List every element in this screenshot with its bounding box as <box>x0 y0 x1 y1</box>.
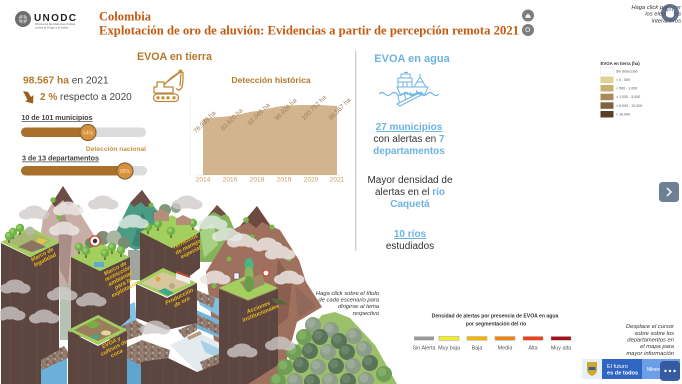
progress bar: departamentos: 3 de 13 departamentos <box>22 154 99 162</box>
mountain: green peak <box>113 190 160 280</box>
icon: search button <box>522 24 534 36</box>
area chart: historic detection: 2018 <box>250 176 265 184</box>
hill: forest <box>270 312 397 384</box>
footer: government banner <box>582 359 680 379</box>
legend: water alert density: Muy alta <box>551 346 571 352</box>
text: highest density: Caquetá <box>390 199 430 210</box>
column: Producción de oro: Producción <box>164 287 195 307</box>
column: Territorios de manejo especial <box>140 203 205 290</box>
note: click on scenario title: de cada escenario para <box>318 298 380 304</box>
progress bar: departamentos: 88% <box>120 169 131 175</box>
column: Territorios de manejo especial: Territorios <box>172 233 199 251</box>
note: move cursor: mayor información <box>626 351 674 357</box>
legend: EVOA en tierra: > 500 - 1.000 <box>616 86 637 90</box>
logo: UNODC <box>15 11 76 30</box>
column: Territorios de manejo especial: especial <box>180 245 203 260</box>
button: next <box>659 182 679 202</box>
legend: water alert density: Media <box>498 346 512 352</box>
text: municipalities and departments in water: con alertas en 7 <box>373 134 445 145</box>
button: more options <box>660 361 680 381</box>
column: EVOA y cultivos de coca <box>68 315 131 384</box>
heading: EVOA en tierra: EVOA en tierra <box>137 51 213 63</box>
column: Marco de legalidad: Marco de <box>30 247 55 263</box>
clouds <box>0 196 304 358</box>
hint: interactive elements: los elementos <box>645 12 681 18</box>
column: Territorios de manejo especial: de manejo <box>175 238 202 256</box>
area chart: historic detection: 92.046 ha <box>246 102 272 127</box>
title: Colombia <box>99 10 152 24</box>
column: Acciones institucionales: institucionales <box>242 304 280 324</box>
legend: EVOA en tierra: Sin detección <box>616 70 638 74</box>
legend: EVOA en tierra: EVOA en tierra (ha) <box>600 61 640 66</box>
column: Marco de restricción ambiental: explotación <box>111 279 142 299</box>
text: rivers studied <box>386 229 434 252</box>
logo: UNODC: UNODC <box>34 13 76 24</box>
note: click on scenario title: Haga click sobre el título <box>316 291 380 297</box>
column: Marco de restricción ambiental: ambiental <box>108 270 134 288</box>
area chart: historic detection: 2016 <box>223 176 238 184</box>
legend: water alert density: por segmentación del río <box>466 322 526 328</box>
heading: Detección histórica: Detección histórica <box>231 75 311 85</box>
progress bar: municipios: 54% <box>83 130 94 136</box>
column: Marco de legalidad <box>1 224 59 384</box>
hint: interactive elements: interactivos <box>652 18 681 24</box>
text: municipalities and departments in water: departamentos <box>373 146 445 157</box>
legend: EVOA en tierra <box>600 61 642 118</box>
progress bar: departamentos <box>21 154 147 179</box>
column: Acciones institucionales: Acciones <box>245 301 271 316</box>
column: EVOA y cultivos de coca: cultivos de <box>100 339 129 358</box>
stat: hectares in 2021: 98.567 ha en 2021 <box>23 76 109 86</box>
area chart: historic detection: 100.752 ha <box>300 94 328 122</box>
area chart: historic detection: 2020 <box>304 176 319 184</box>
area chart: historic detection: 2014 <box>196 176 211 184</box>
stat: change versus 2020: 2 % respecto a 2020 <box>40 92 132 103</box>
column: Acciones institucionales <box>219 258 287 384</box>
column: Marco de legalidad: legalidad <box>33 252 58 269</box>
text: municipalities and departments in water: 27 municipios <box>376 122 443 133</box>
icon: dredging boat <box>379 72 439 106</box>
legend: water alert density: Sin Alerta <box>412 346 436 352</box>
note: click on scenario title <box>316 291 380 317</box>
legend: EVOA en tierra: > 10.000 <box>616 112 630 116</box>
icon: home button <box>522 10 534 22</box>
illustration: mountains and scenarios <box>0 186 397 384</box>
note: move cursor <box>626 324 675 357</box>
progress bar: municipios: 10 de 101 municipios <box>22 113 92 122</box>
note: move cursor: el mapa para <box>640 344 675 350</box>
column: Marco de restricción ambiental: restricción <box>104 265 133 283</box>
legend: water alert density: Densidad de alertas por presencia de EVOA en agua <box>432 314 558 320</box>
column: Producción de oro <box>136 268 198 330</box>
title <box>99 10 519 38</box>
column: Marco de restricción ambiental: para la <box>113 278 133 292</box>
riverbank: rock bands <box>37 288 223 372</box>
area chart: historic detection: 98.567 ha <box>327 97 353 122</box>
legend: water alert density: Baja <box>472 346 482 352</box>
note: move cursor: Desplace el cursor <box>626 324 675 330</box>
area chart: historic detection: 2019 <box>277 176 292 184</box>
legend: water alert density: Alta <box>528 346 538 352</box>
footer: government banner: Minenergía <box>647 367 672 373</box>
mountain: right green peak <box>196 205 238 262</box>
text: municipalities and departments in water <box>373 122 445 157</box>
column: Marco de restricción ambiental <box>71 230 142 338</box>
area chart: historic detection <box>190 94 353 184</box>
mountain: large brown <box>206 206 322 384</box>
title: Explotación de oro de aluvión: Evidencias a partir de percepción remota 2021 <box>99 24 519 38</box>
footer: government banner: El futuro <box>607 364 628 370</box>
label: Detección nacional: Detección nacional <box>86 146 146 153</box>
note: click on scenario title: dirigirse al tema <box>338 304 380 310</box>
legend: EVOA en tierra: > 0 - 500 <box>616 78 630 82</box>
column: Producción de oro: de oro <box>173 296 192 309</box>
hint: interactive elements: Haga click para ver <box>631 5 682 11</box>
note: click on scenario title: respectivo <box>353 311 380 317</box>
progress bar: municipios <box>21 113 146 140</box>
text: rivers studied: estudiados <box>386 241 434 252</box>
column: Marco de restricción ambiental: Marco de <box>103 261 128 277</box>
icon: excavator <box>154 70 183 102</box>
logo: UNODC: Oficina de las Naciones Unidas <box>35 22 76 26</box>
heading: EVOA en agua: EVOA en agua <box>374 53 451 65</box>
note: move cursor: sobre sobre los <box>634 331 674 337</box>
text: rivers studied: 10 ríos <box>394 229 427 240</box>
note: move cursor: departamentos en <box>627 338 674 344</box>
mountain: pink peak <box>40 186 97 340</box>
area chart: historic detection: 78.939 ha <box>192 110 218 135</box>
text: highest density: Mayor densidad de <box>367 175 453 186</box>
text: highest density: alertas en el río <box>375 187 445 198</box>
footer: government banner: es de todos <box>607 370 638 376</box>
legend: EVOA en tierra: > 1.000 - 5.000 <box>616 95 640 99</box>
text: highest density <box>367 175 453 210</box>
area chart: historic detection: 2021 <box>330 176 345 184</box>
river: waterfalls and pools <box>41 290 237 384</box>
area chart: historic detection: 83.620 ha <box>219 107 245 132</box>
legend: EVOA en tierra: > 5.000 - 10.000 <box>616 104 642 108</box>
column: EVOA y cultivos de coca: coca <box>110 348 124 359</box>
legend: water alert density: Muy baja <box>438 346 460 352</box>
legend: water alert density <box>412 314 571 352</box>
rock base: lower middle <box>141 358 223 384</box>
area chart: historic detection: 98.028 ha <box>273 97 299 122</box>
column: EVOA y cultivos de coca: EVOA y <box>101 335 123 350</box>
logo: UNODC: contra la Droga y el Delito <box>35 26 69 30</box>
hint: interactive elements <box>631 4 682 24</box>
